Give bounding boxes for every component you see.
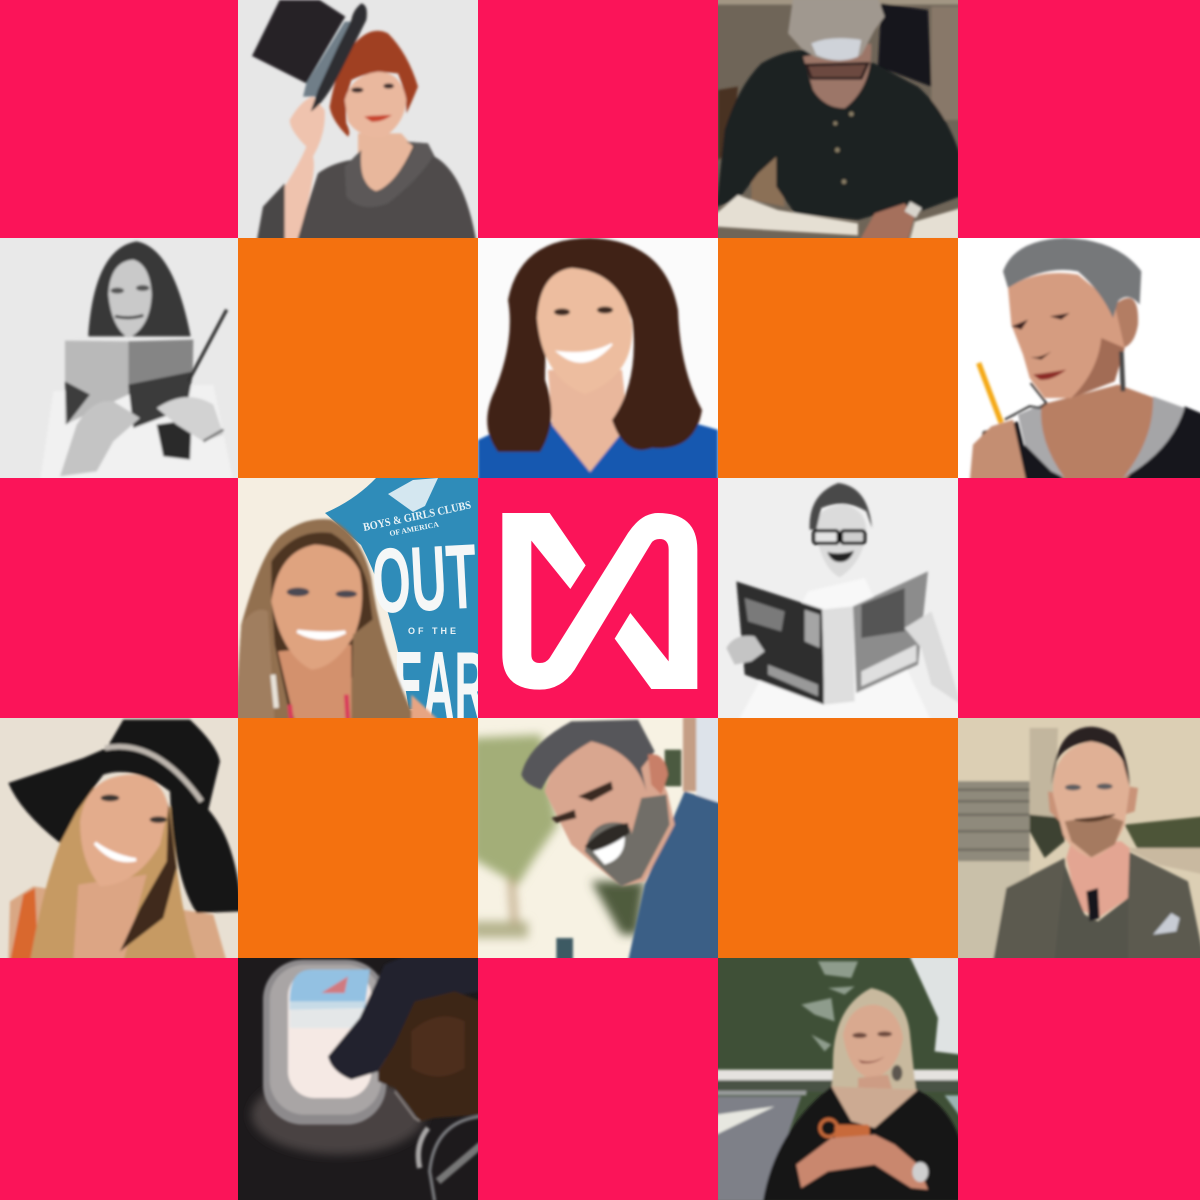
photo: grey-haired bearded man in denim shirt bbox=[471, 716, 725, 961]
banner: Boys & Girls Clubs Youth of the Year bbox=[325, 478, 478, 718]
photo: blonde woman with mug outdoors bbox=[716, 956, 961, 1200]
banner: Boys & Girls Clubs Youth of the Year: OF THE bbox=[408, 626, 459, 636]
center logo bbox=[502, 513, 697, 690]
photo: man in cap by airplane window bbox=[238, 956, 481, 1200]
banner: Boys & Girls Clubs Youth of the Year: OF AMERICA bbox=[389, 519, 440, 538]
orange tiles bbox=[238, 238, 958, 958]
photo: woman in black wide-brim hat bbox=[0, 718, 242, 961]
photo: girl holding book and wand bbox=[0, 238, 238, 481]
photo: man in tweed jacket bbox=[956, 718, 1200, 961]
photo: man in foil hat at desk bbox=[715, 0, 961, 240]
photo: woman at Youth of the Year banner bbox=[238, 478, 478, 718]
photo: woman tipping a top hat bbox=[238, 0, 478, 243]
photo: woman with glasses reading a book bbox=[718, 478, 961, 721]
photo: woman with long brown hair in blue top bbox=[478, 238, 718, 490]
portrait checkerboard grid: EAR bbox=[394, 631, 486, 741]
banner: Boys & Girls Clubs Youth of the Year: BOYS & GIRLS CLUBS bbox=[362, 499, 472, 534]
banner: Boys & Girls Clubs Youth of the Year: OUTI bbox=[370, 525, 493, 633]
photo: woman with short grey hair and pencil bbox=[958, 238, 1200, 481]
